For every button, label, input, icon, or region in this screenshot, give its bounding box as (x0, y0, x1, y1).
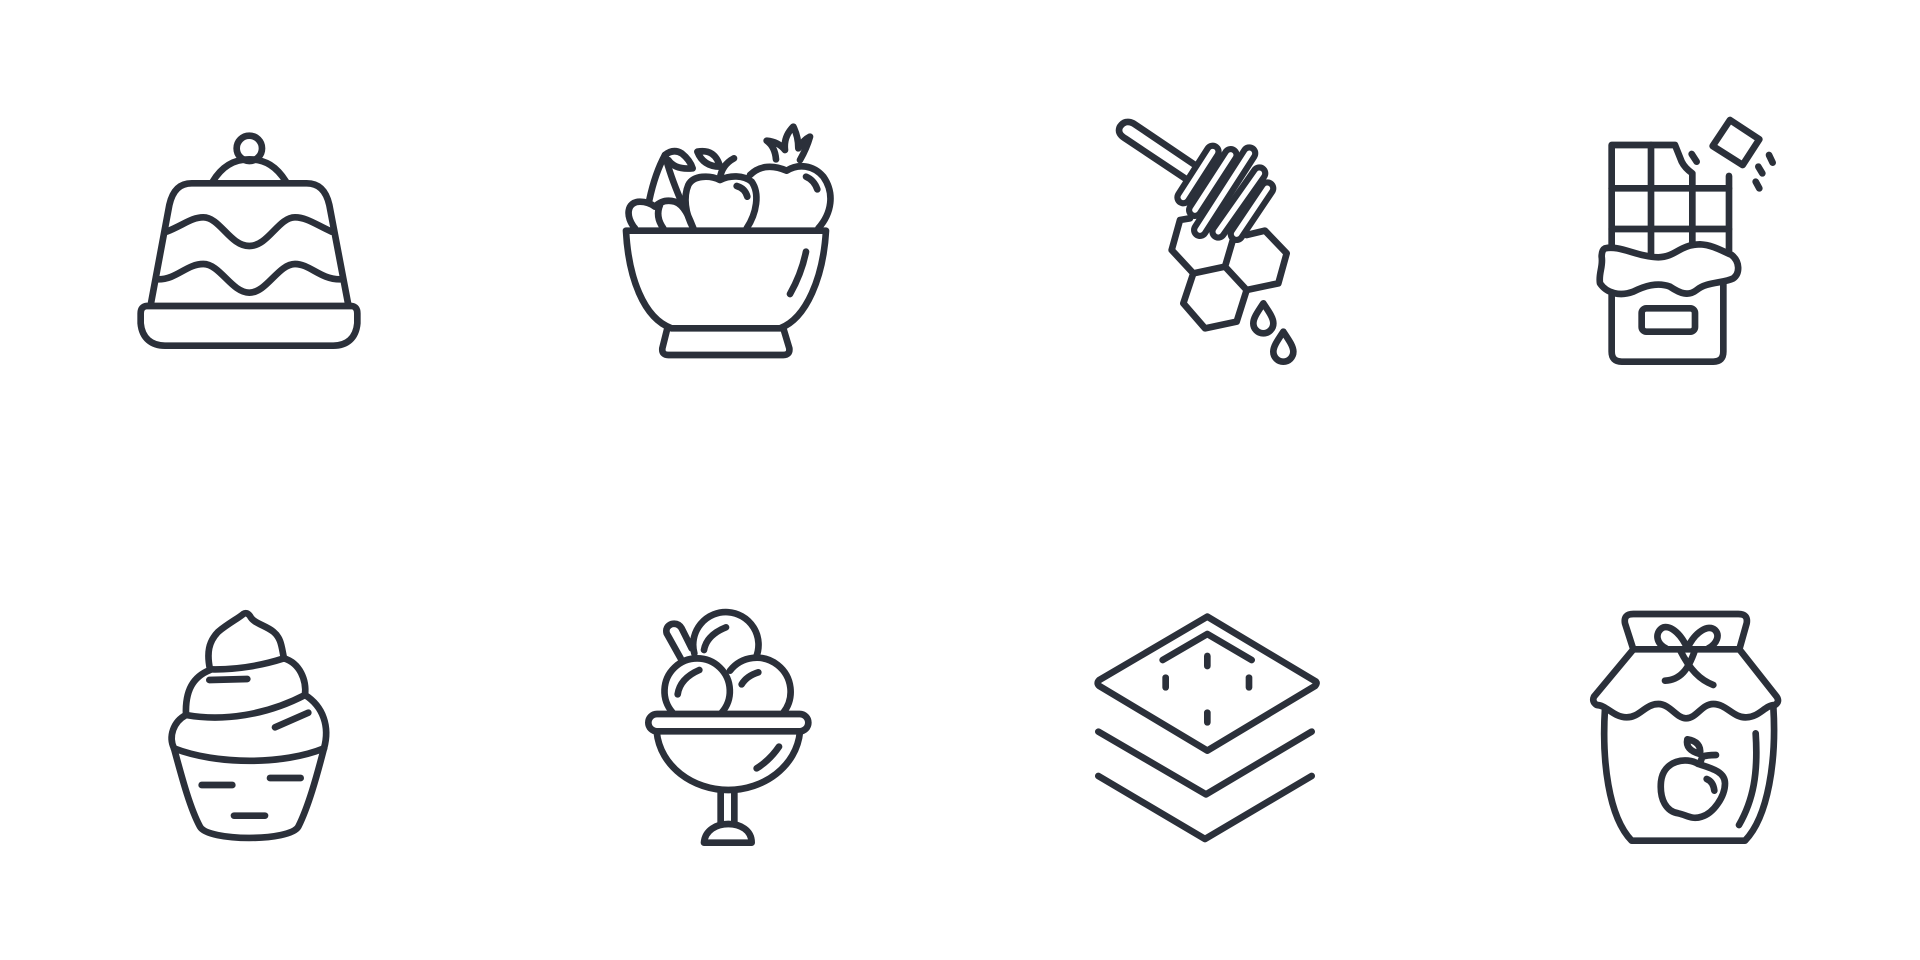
icon: stacked wafer layers (1098, 617, 1316, 839)
icon: ice cream sundae (648, 612, 808, 843)
icon: honey dipper and honeycomb (1119, 122, 1293, 362)
icon: chocolate bar (1600, 120, 1773, 362)
icon: apple jam jar (1593, 614, 1778, 841)
icon: fruit bowl (626, 127, 830, 355)
icon: layered pudding cake (141, 136, 357, 346)
icon: cupcake (172, 613, 326, 838)
